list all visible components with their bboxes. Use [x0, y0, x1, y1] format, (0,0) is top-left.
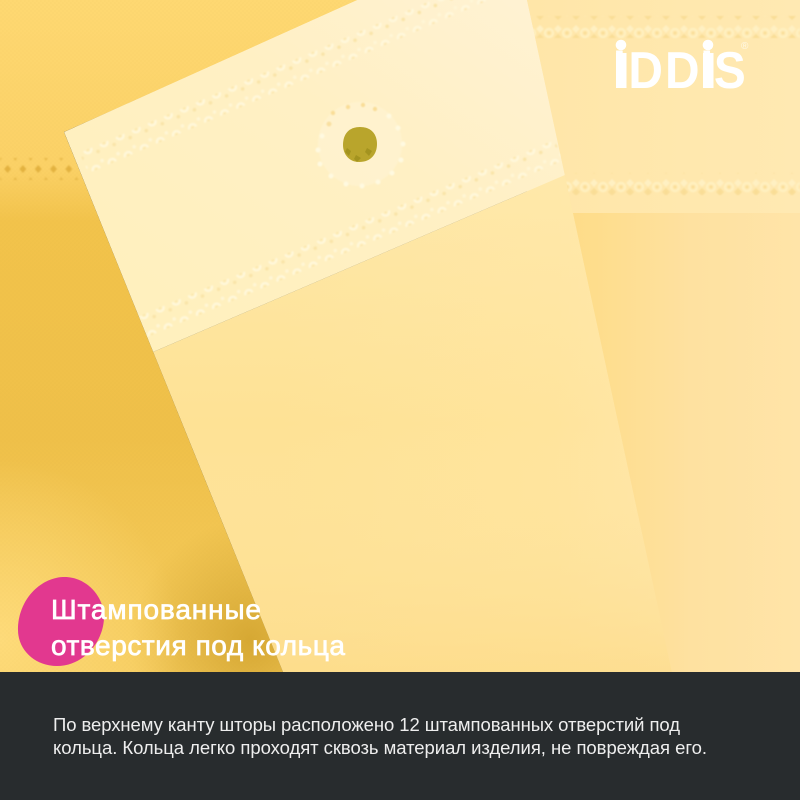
stamped ring around the hole — [316, 102, 406, 188]
pink blob accent — [18, 577, 104, 666]
body text — [53, 714, 707, 758]
stamped row, top — [528, 16, 800, 38]
dark footer band — [0, 672, 800, 800]
stamped row, lower — [565, 173, 800, 195]
background: pale curtain layer on the right — [527, 0, 800, 673]
title: отверстия под кольца — [51, 630, 345, 661]
front curtain panel — [64, 0, 672, 672]
body text: кольца. Кольца легко проходят сквозь материал изделия, не повреждая его. — [53, 737, 707, 758]
background: yellow curtain layer on the left — [0, 0, 357, 672]
title: Штампованные — [51, 594, 261, 625]
stamped row, upper hem — [82, 0, 485, 172]
stamped row on the left layer — [0, 158, 78, 180]
title — [51, 594, 345, 661]
logo: ® — [741, 41, 749, 52]
body text: По верхнему канту шторы расположено 12 штампованных отверстий под — [53, 714, 680, 735]
logo: iDDiS — [613, 41, 746, 99]
hem band — [64, 0, 565, 352]
stamped row, lower hem — [136, 140, 563, 338]
punched hole — [343, 127, 377, 162]
